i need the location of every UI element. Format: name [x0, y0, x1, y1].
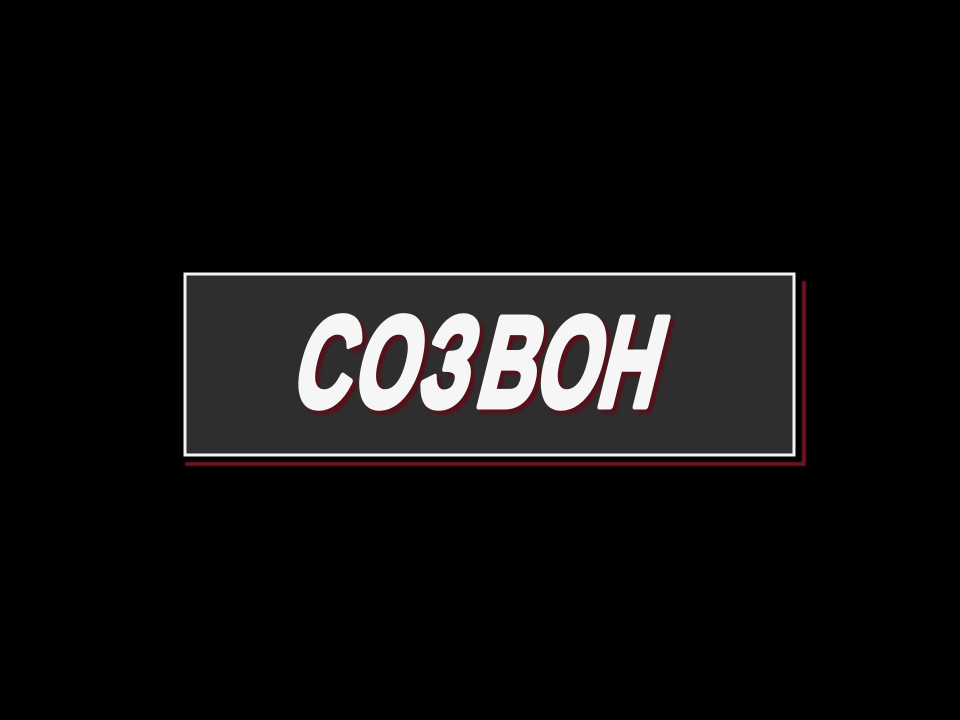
panel: title box [185, 274, 794, 455]
title: СОЗВОН [282, 291, 680, 434]
red offset shadow of panel [185, 281, 806, 466]
title shadow: СОЗВОН [286, 295, 684, 438]
